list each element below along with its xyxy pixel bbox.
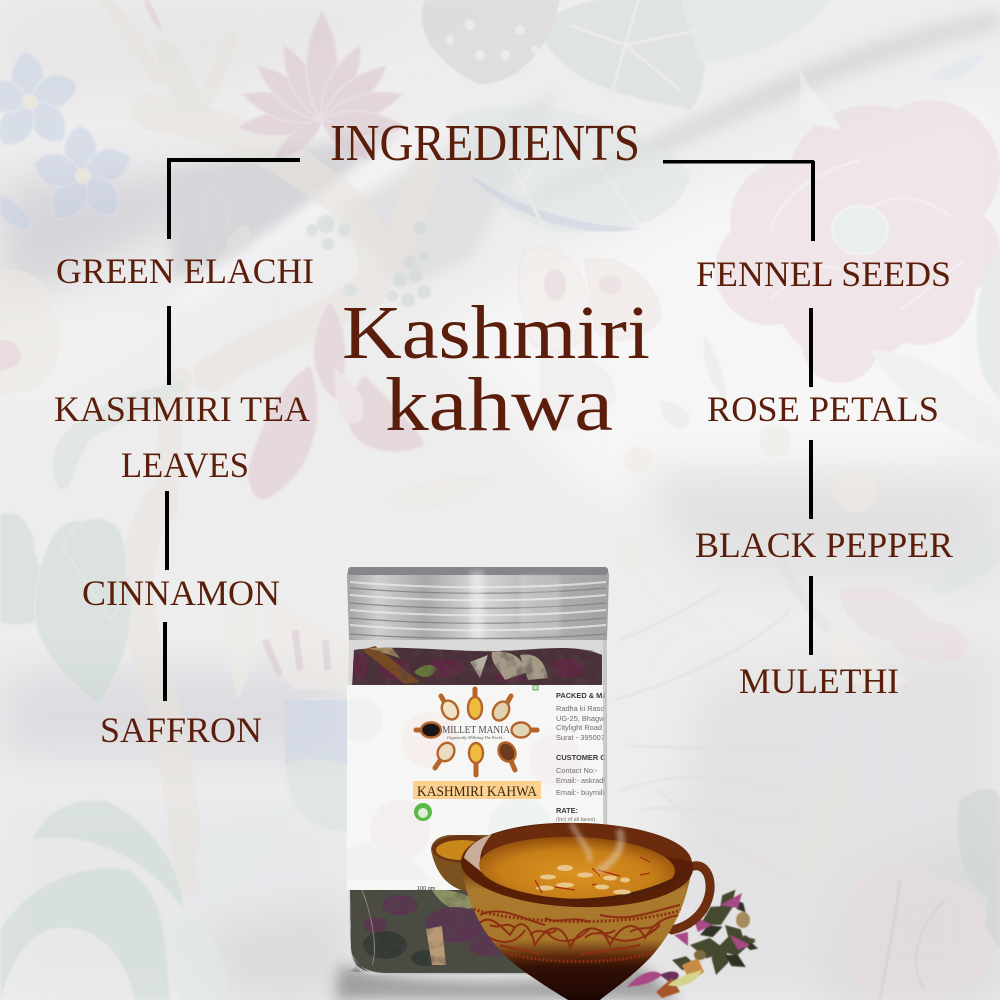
butterfly petals mid bbox=[519, 248, 590, 351]
ingredient list: left: SAFFRON bbox=[100, 710, 262, 750]
connector lines: right bbox=[663, 160, 815, 655]
big green leaves bbox=[0, 513, 295, 1000]
small cup behind bbox=[431, 835, 500, 893]
connector lines: left bbox=[163, 158, 300, 701]
back panel text: Surat - 395007 bbox=[556, 733, 605, 742]
scroll pink ornament bbox=[248, 300, 490, 507]
cup body bbox=[461, 862, 692, 1000]
title: Kashmiri kahwa bbox=[342, 291, 650, 447]
ingredient list: right: FENNEL SEEDS bbox=[696, 254, 951, 294]
label print bbox=[338, 698, 581, 880]
ingredient list: left: CINNAMON bbox=[82, 573, 280, 613]
ingredient list: left: GREEN ELACHI bbox=[56, 251, 314, 291]
lower-left flower bbox=[285, 698, 350, 828]
back panel text: UG-25, Bhagwati bbox=[556, 714, 613, 723]
heading: ingredients: INGREDIENTS bbox=[330, 115, 640, 172]
ingredient list: right: BLACK PEPPER bbox=[695, 525, 953, 565]
berries bbox=[306, 215, 431, 307]
back panel text: Email:- askradha bbox=[556, 776, 612, 785]
back panel text bbox=[556, 693, 605, 822]
title: Kashmiri kahwa: Kashmiri bbox=[342, 291, 650, 375]
ingredient list: right: MULETHI bbox=[739, 661, 899, 701]
back panel text: (Incl of all taxes) bbox=[556, 817, 595, 823]
seed pods bbox=[157, 40, 210, 115]
loose tea herbs bbox=[627, 886, 759, 998]
logo spoons bbox=[416, 689, 537, 775]
main cup bbox=[460, 819, 710, 1000]
steam bbox=[572, 825, 621, 870]
product: jar bbox=[335, 567, 680, 1000]
lower tea contents bbox=[350, 888, 605, 975]
lower right flowers and birds bbox=[830, 585, 992, 1000]
blue flowers bbox=[0, 52, 135, 230]
ingredient list: left: LEAVES bbox=[121, 445, 249, 485]
cup handle bbox=[672, 866, 710, 930]
jar label: KASHMIRI KAHWA bbox=[417, 784, 537, 800]
ingredient list: left bbox=[54, 251, 314, 750]
feather strokes bbox=[615, 590, 800, 880]
cup pattern bbox=[470, 905, 688, 962]
saffron and almond garnish bbox=[535, 857, 650, 894]
left side flower bbox=[0, 269, 60, 395]
ingredient list: right bbox=[695, 254, 953, 701]
jar body bbox=[348, 640, 607, 975]
upper tea contents bbox=[352, 646, 602, 688]
tree trunks bbox=[105, 0, 425, 880]
butterfly shape bbox=[422, 0, 830, 232]
back panel text: Citylight Road bbox=[556, 723, 602, 732]
jar shadow bbox=[335, 965, 680, 1000]
jar label: 100 gm bbox=[417, 886, 436, 892]
vegetarian and certification marks bbox=[533, 685, 538, 690]
tea surface bbox=[478, 834, 676, 902]
back panel text: Contact No:- bbox=[556, 766, 598, 775]
ingredient list: right: ROSE PETALS bbox=[707, 389, 939, 429]
back panel text: Radha ki Rasoi bbox=[556, 704, 606, 713]
logo wordmark: MILLET MANIA bbox=[442, 724, 510, 736]
right side leaves bbox=[977, 250, 1000, 400]
jar lid bbox=[347, 567, 609, 640]
pink peony bbox=[715, 100, 1000, 383]
back panel text: Email:- buymillet bbox=[556, 788, 610, 797]
product name banner bbox=[413, 781, 541, 799]
back panel text: CUSTOMER CARE bbox=[556, 753, 621, 762]
cup rim bbox=[460, 819, 694, 911]
jar label: Organically Milleting The World... bbox=[447, 735, 505, 740]
back panel text: RATE: bbox=[556, 806, 578, 815]
title: Kashmiri kahwa: kahwa bbox=[385, 363, 613, 447]
jar label bbox=[347, 685, 605, 890]
back panel text: PACKED & MARKETED BY bbox=[556, 691, 650, 700]
tea leaf green bbox=[52, 380, 190, 490]
ingredient list: left: KASHMIRI TEA bbox=[54, 389, 310, 429]
pink lotus bbox=[237, 11, 407, 167]
